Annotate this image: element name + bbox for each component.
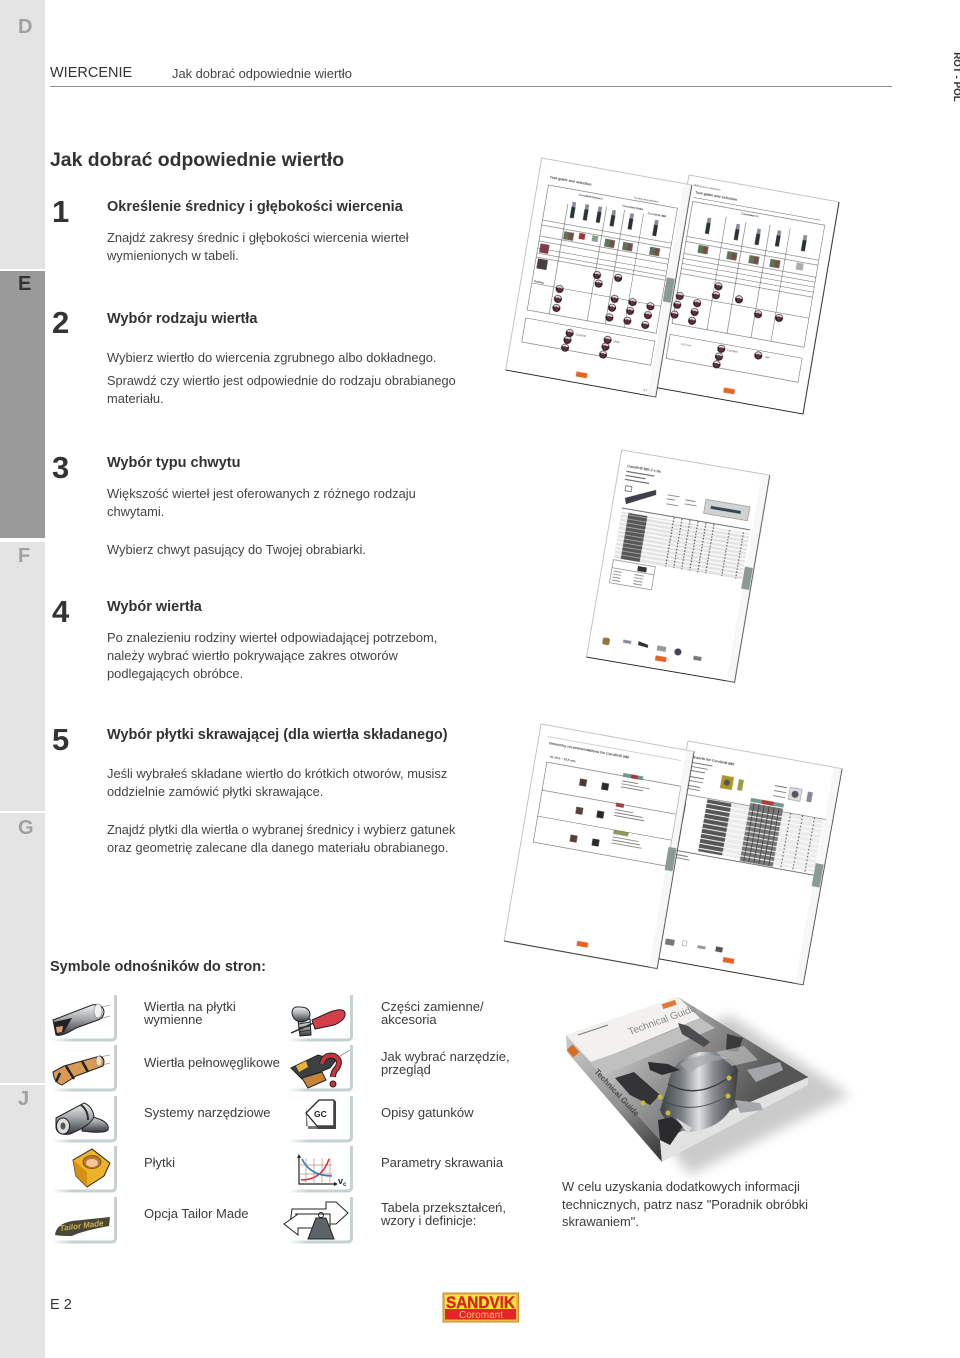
step 4 text: Po znalezieniu rodziny wierteł odpowiadającej potrzebom,	[107, 630, 437, 645]
step 5 heading: Wybór płytki skrawającej (dla wiertła składanego)	[107, 727, 448, 743]
technical guide note	[562, 1179, 808, 1229]
step 2 text: Sprawdź czy wiertło jest odpowiednie do rodzaju obrabianego	[107, 373, 456, 388]
icon: cutting data chart: v	[338, 1176, 343, 1186]
document page: tool guide (left): Delta	[613, 339, 621, 344]
step 3 text: chwytami.	[107, 504, 164, 519]
sidebar tab J	[0, 1085, 45, 1358]
symbol label: indexable drills: Wiertła na płytki	[144, 999, 236, 1014]
symbol label: solid carbide drills: Wiertła pełnowęglikowe	[144, 1055, 280, 1070]
symbol label: Tailor Made: Opcja Tailor Made	[144, 1206, 249, 1221]
document page: tool guide (left): CoroDrill	[575, 332, 586, 338]
symbol label: indexable drills	[144, 999, 236, 1027]
step 2 text: materiału.	[107, 391, 164, 406]
icon: tool selection question mark	[291, 1050, 350, 1088]
book: Technical Guide	[566, 997, 808, 1162]
Sandvik Coromant logo	[443, 1293, 518, 1322]
document page: tool guide (right): Milling and selection	[693, 183, 721, 192]
symbol label: conversion table	[381, 1200, 506, 1228]
step 4 heading: Wybór wiertła	[107, 599, 202, 615]
step 1 text: Znajdź zakresy średnic i głębokości wiercenia wierteł	[107, 230, 409, 245]
document page: geometry recommendations: Geometry recommendations for CoroDrill 880	[549, 741, 630, 759]
icon: spare parts	[291, 1007, 345, 1036]
icon: cutting data chart: c	[343, 1182, 347, 1188]
header section title: WIERCENIE	[50, 65, 132, 81]
step 3 heading: Wybór typu chwytu	[107, 455, 240, 471]
document page: tool guide (left): E 2	[643, 388, 648, 392]
document page: tool guide (left): Coromant Delta	[622, 204, 644, 211]
document page: tool guide (left): CoroDrill Delta-C	[578, 193, 604, 201]
technical guide note: skrawaniem".	[562, 1214, 639, 1229]
step 5 text: oraz geometrię zalecane dla danego materiału obrabianego.	[107, 840, 448, 855]
document page: tool guide (right): CoroDrill	[727, 348, 738, 354]
icon: conversion weight and arrows	[284, 1202, 348, 1239]
document page: tool guide (right): E 3	[645, 375, 650, 380]
icon: cutting data chart	[297, 1154, 347, 1188]
document page: geometry recommendations: Dc 20,5 – 23,5 mm	[550, 755, 576, 763]
step 2 heading: Wybór rodzaju wiertła	[107, 311, 257, 327]
step 4 text: należy wybrać wiertło pokrywające zakres otworów	[107, 648, 398, 663]
icon: grade GC tag	[306, 1100, 336, 1129]
symbol label: spare parts	[381, 999, 484, 1027]
document page: tool guide (right): Stiff	[765, 355, 770, 360]
icon: solid carbide drill	[53, 1055, 110, 1085]
Sandvik Coromant logo: Coromant	[459, 1310, 503, 1321]
symbol label: tool selection: przegląd	[381, 1062, 431, 1077]
technical guide note: technicznych, patrz nasz "Poradnik obróbki	[562, 1196, 808, 1212]
icon panels: left column	[52, 995, 116, 1242]
step 5 text: Znajdź płytki dla wiertła o wybranej średnicy i wybierz gatunek	[107, 823, 455, 837]
document page: tool guide (right)	[644, 173, 839, 414]
symbol label: tool selection: Jak wybrać narzędzie,	[381, 1049, 510, 1064]
step 3 number: 3	[52, 450, 69, 485]
step 5 number: 5	[52, 722, 69, 757]
symbol label: cutting data: Parametry skrawania	[381, 1155, 503, 1170]
document page: drill data table	[587, 450, 770, 682]
document page: tool guide (left)	[506, 158, 692, 397]
symbol label: grades: Opisy gatunków	[381, 1105, 474, 1120]
symbol label: spare parts: Części zamienne/	[381, 999, 484, 1014]
book shadow	[610, 1015, 850, 1175]
document page: tool guide (left): Tool guide and selection	[549, 175, 592, 186]
icon: insert	[73, 1149, 110, 1187]
step 3 text: Większość wierteł jest oferowanych z różnego rodzaju	[107, 486, 416, 501]
sidebar tab D	[0, 0, 45, 269]
header subtitle: Jak dobrać odpowiednie wiertło	[172, 66, 352, 81]
step 3 text: Wybierz chwyt pasujący do Twojej obrabiarki.	[107, 542, 366, 557]
document page: drill data table: CoroDrill 880 3 x Dc	[627, 464, 661, 474]
icon: Tailor Made	[55, 1217, 110, 1236]
symbol label: indexable drills: wymienne	[144, 1012, 203, 1027]
step 2 text: Wybierz wiertło do wiercenia zgrubnego albo dokładnego.	[107, 350, 437, 365]
sidebar letter E: E	[18, 273, 31, 295]
sidebar letter J: J	[18, 1088, 29, 1110]
symbol label: spare parts: akcesoria	[381, 1012, 437, 1027]
step 1 text	[107, 230, 409, 263]
document page: inserts table: Inserts for CoroDrill 880	[693, 755, 734, 767]
header rule	[50, 86, 892, 87]
step 1 heading: Określenie średnicy i głębokości wiercenia	[107, 199, 403, 215]
icon: tooling system	[56, 1103, 108, 1134]
icon panels: right column	[288, 995, 352, 1242]
section heading: symbols: Symbole odnośników do stron:	[50, 959, 266, 975]
step 4 text: podlegających obróbce.	[107, 666, 243, 681]
book: Technical Guide: Technical Guide	[627, 1003, 699, 1038]
technical guide note: W celu uzyskania dodatkowych informacji	[562, 1179, 800, 1194]
document page: tool guide (right): ≥1,0 mm	[681, 342, 692, 348]
step 2 text	[107, 350, 456, 406]
step 3 text	[107, 486, 416, 557]
sidebar letter G: G	[18, 817, 34, 839]
document page: tool guide (right): Coromant U	[741, 211, 759, 218]
symbol label: inserts: Płytki	[144, 1155, 175, 1170]
document page: tool guide (left): Turning and selection	[634, 195, 659, 204]
Sandvik Coromant logo: SANDVIK	[446, 1293, 516, 1312]
sidebar tab F	[0, 542, 45, 811]
icon: grade GC tag: GC	[314, 1109, 327, 1119]
step 5 text: Jeśli wybrałeś składane wiertło do krótkich otworów, musisz	[107, 766, 447, 781]
sidebar tab E	[0, 271, 45, 538]
step 4 number: 4	[52, 594, 69, 629]
main title: Jak dobrać odpowiednie wiertło	[50, 149, 344, 171]
document page: tool guide (left): CoroDrill 880	[647, 211, 667, 219]
page number: E 2	[50, 1297, 72, 1313]
symbol label: conversion table: Tabela przekształceń,	[381, 1200, 506, 1215]
step 5 text	[107, 766, 456, 855]
step 1 number: 1	[52, 194, 69, 229]
book: Technical Guide: Technical Guide	[593, 1067, 641, 1119]
document page: inserts table	[649, 741, 842, 985]
symbol label: tooling systems: Systemy narzędziowe	[144, 1105, 270, 1120]
icon: Tailor Made: Tailor Made	[59, 1219, 105, 1233]
step 2 number: 2	[52, 305, 69, 340]
sidebar tab G	[0, 813, 45, 1083]
symbol label: conversion table: wzory i definicje:	[381, 1213, 476, 1228]
icon: indexable insert drill	[53, 1004, 110, 1035]
step 1 text: wymienionych w tabeli.	[107, 248, 239, 263]
step 5 text: oddzielnie zamówić płytki skrawające.	[107, 784, 323, 799]
sidebar letter F: F	[18, 545, 30, 567]
document page: tool guide (right): Tool guide and selection	[695, 191, 737, 202]
sidebar letter D: D	[18, 16, 32, 38]
symbol label: tool selection	[381, 1049, 510, 1077]
step 4 text	[107, 630, 437, 681]
document page: tool guide (left): Drilling	[534, 279, 544, 285]
document page: geometry recommendations	[504, 724, 694, 969]
